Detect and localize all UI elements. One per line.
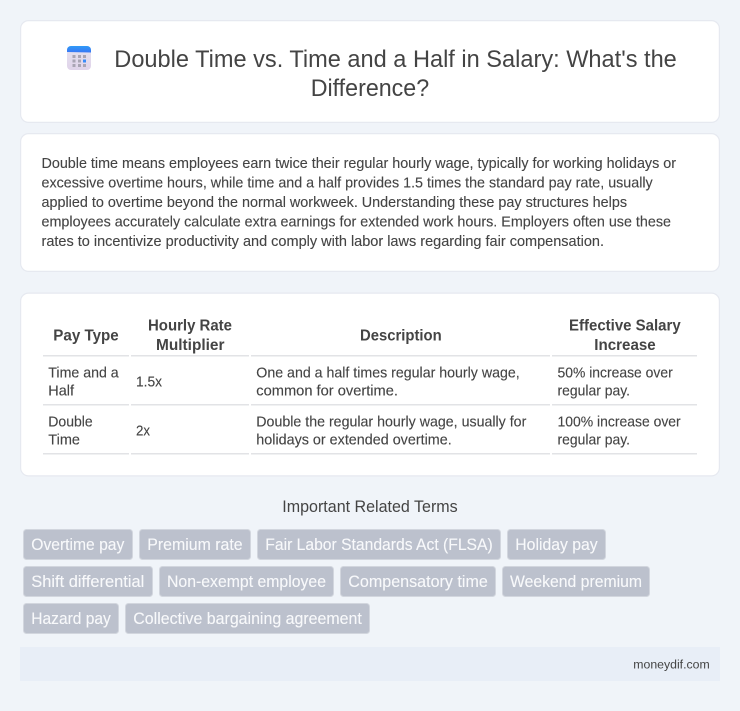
table row: time and a half: 1.5x <box>136 374 163 390</box>
text block: explanation <box>42 156 676 250</box>
footer <box>20 647 720 681</box>
table row: time and a half: 50% increase over <box>558 365 673 381</box>
tag: overtime pay: Overtime pay <box>31 536 125 554</box>
table row: double time: 100% increase over <box>558 414 681 430</box>
table row: double time: Time <box>48 432 80 448</box>
table row: double time: 2x <box>136 423 151 439</box>
text block: explanation: employees accurately calculate extra earnings for extended work hours. Employers often use these <box>42 214 671 230</box>
icon: calendar <box>67 46 91 70</box>
table row: time and a half: One and a half times regular hourly wage, <box>256 365 520 381</box>
tag: hazard pay: Hazard pay <box>31 610 112 628</box>
tag: shift differential: Shift differential <box>31 573 144 591</box>
tag: FLSA <box>258 530 500 560</box>
tag: shift differential <box>24 566 152 596</box>
table header row: Hourly Rate <box>148 318 232 335</box>
panel: comparison table <box>21 293 719 476</box>
tag: weekend premium <box>502 566 650 596</box>
table header row: Effective Salary <box>569 318 681 335</box>
table row: time and a half: common for overtime. <box>256 383 398 399</box>
table header row: Increase <box>594 337 656 354</box>
tag: hazard pay <box>24 604 118 634</box>
tag: premium rate <box>140 530 250 560</box>
text block: explanation: Double time means employees earn twice their regular hourly wage, typically for working holidays or <box>42 156 676 172</box>
tag: non-exempt employee: Non-exempt employee <box>167 573 326 591</box>
table row: double time: holidays or extended overtime. <box>256 432 452 448</box>
text block: explanation: applied to overtime beyond the normal workweek. Understanding these pay structures helps <box>42 195 627 211</box>
table header row: Multiplier <box>156 337 224 354</box>
tag: non-exempt employee <box>160 566 334 596</box>
tag: compensatory time <box>340 566 496 596</box>
table row: time and a half: Half <box>48 383 75 399</box>
table row: double time: regular pay. <box>558 432 630 448</box>
title <box>114 46 677 102</box>
tag: collective bargaining agreement <box>126 604 370 634</box>
heading: important related terms: Important Related Terms <box>282 498 458 516</box>
tag: overtime pay <box>24 530 132 560</box>
title: Difference? <box>311 75 429 102</box>
table header row <box>53 318 681 354</box>
table row: time and a half: regular pay. <box>558 383 630 399</box>
table row: double time <box>48 414 681 448</box>
tag: collective bargaining agreement: Collective bargaining agreement <box>133 610 362 628</box>
tag: holiday pay: Holiday pay <box>515 536 598 554</box>
tag: compensatory time: Compensatory time <box>348 573 488 591</box>
panel: header <box>21 21 719 122</box>
tag list: related terms <box>24 530 650 634</box>
tag: premium rate: Premium rate <box>147 536 243 554</box>
table row: double time: Double the regular hourly wage, usually for <box>256 414 527 430</box>
tag: weekend premium: Weekend premium <box>510 573 642 591</box>
text block: explanation: excessive overtime hours, while time and a half provides 1.5 times the standard pay rate, usually <box>42 176 653 192</box>
title: Double Time vs. Time and a Half in Salary: What's the <box>114 46 677 73</box>
table row: time and a half: Time and a <box>48 365 119 381</box>
panel: intro text <box>21 134 719 271</box>
text block: explanation: rates to incentivize productivity and comply with labor laws regarding fair compensation. <box>42 234 604 250</box>
table header row: Description <box>360 328 442 345</box>
table row: double time: Double <box>48 414 93 430</box>
tag: holiday pay <box>508 530 606 560</box>
table header row: Pay Type <box>53 328 119 345</box>
tag: FLSA: Fair Labor Standards Act (FLSA) <box>265 536 493 554</box>
table row: time and a half <box>48 365 673 399</box>
footer: moneydif.com <box>633 657 710 671</box>
